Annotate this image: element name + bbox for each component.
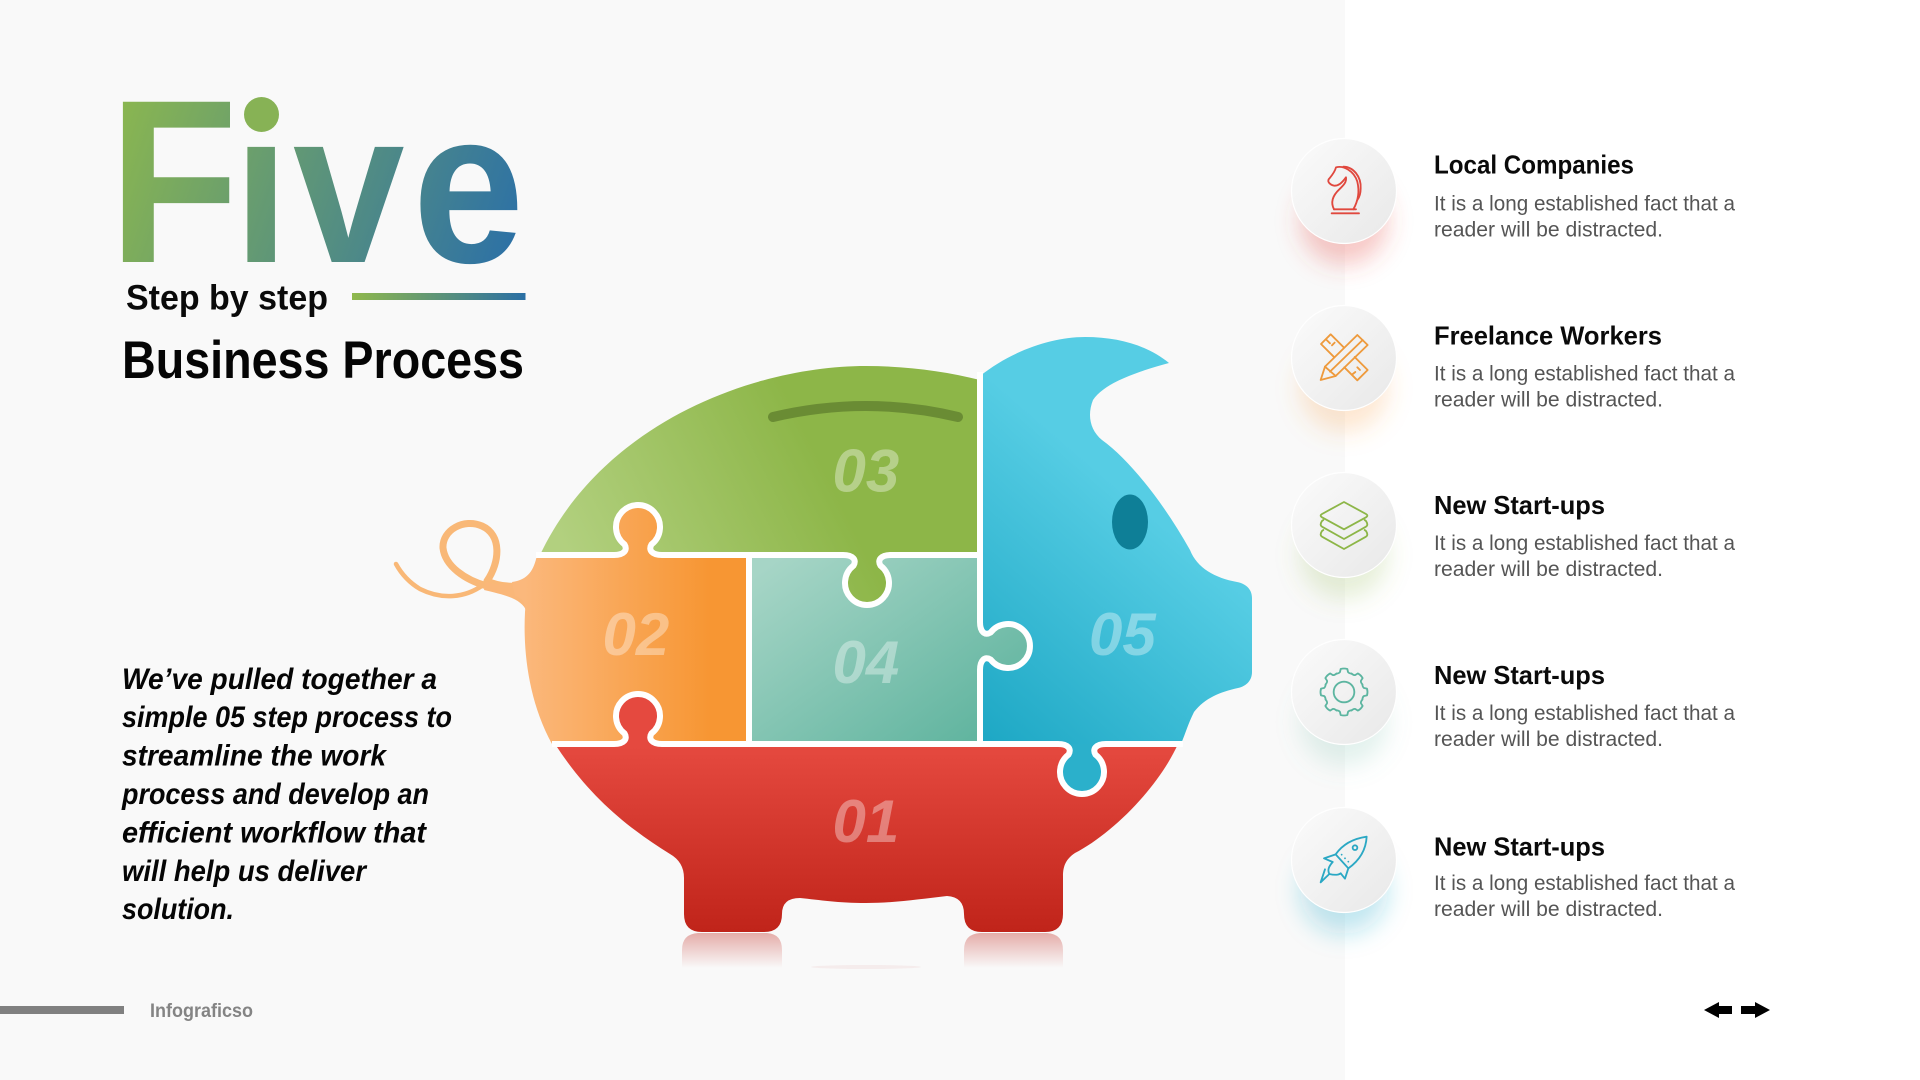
intro paragraph: efficient workflow that xyxy=(122,816,428,850)
intro paragraph: We’ve pulled together a xyxy=(122,663,437,696)
puzzle piece 01: red belly xyxy=(555,694,1178,932)
puzzle piece 02: orange rump xyxy=(512,505,749,744)
title word: Five xyxy=(122,97,518,264)
step 5: New Start-ups xyxy=(1292,808,1735,934)
icon: rocket xyxy=(1321,837,1367,882)
pig eye xyxy=(1112,494,1148,550)
piggy bank puzzle xyxy=(396,337,1252,969)
step 2: Freelance Workers xyxy=(1292,306,1735,432)
step 4: New Start-ups: reader will be distracted. xyxy=(1434,728,1663,751)
puzzle piece 04: teal xyxy=(749,555,1030,744)
intro paragraph: simple 05 step process to xyxy=(122,701,452,734)
step 5: New Start-ups: New Start-ups xyxy=(1434,832,1605,862)
number 03: 03 xyxy=(832,438,899,504)
blue puzzle tab xyxy=(1058,744,1106,794)
intro paragraph xyxy=(121,663,452,926)
step 3: New Start-ups: New Start-ups xyxy=(1434,490,1605,520)
intro paragraph: will help us deliver xyxy=(122,855,368,888)
step 2: Freelance Workers: reader will be distracted. xyxy=(1434,388,1663,412)
footer brand xyxy=(0,1001,253,1022)
step 5: New Start-ups: reader will be distracted. xyxy=(1434,898,1663,921)
pig leg reflections xyxy=(682,933,1063,969)
step 4: New Start-ups: It is a long established fact that a xyxy=(1434,702,1735,725)
step 1: Local Companies xyxy=(1292,138,1735,265)
step 3: New Start-ups xyxy=(1292,472,1735,599)
number 01: 01 xyxy=(832,788,899,855)
icon: pencil and ruler xyxy=(1321,334,1368,380)
step 5: New Start-ups: It is a long established fact that a xyxy=(1434,872,1735,895)
number 05: 05 xyxy=(1089,601,1157,668)
gradient rule xyxy=(352,293,526,300)
intro paragraph: solution. xyxy=(122,893,234,926)
heading: Business Process: Business Process xyxy=(122,331,524,390)
step 4: New Start-ups xyxy=(1292,640,1735,766)
step 2: Freelance Workers: It is a long established fact that a xyxy=(1434,362,1735,386)
pig tail xyxy=(396,523,531,612)
title block xyxy=(122,97,526,378)
navigation arrows xyxy=(1704,1002,1770,1018)
coin slot xyxy=(773,406,958,417)
subtitle: step by step: Step by step xyxy=(126,278,328,318)
white puzzle seams xyxy=(536,372,1183,794)
number 04: 04 xyxy=(832,629,899,696)
step 3: New Start-ups: reader will be distracted. xyxy=(1434,558,1663,581)
title word: Five: ive xyxy=(233,65,524,309)
icon: chess knight xyxy=(1328,167,1361,213)
step 1: Local Companies: Local Companies xyxy=(1434,150,1634,180)
puzzle piece 05: head xyxy=(980,337,1252,744)
step 1: Local Companies: reader will be distracted. xyxy=(1434,218,1663,242)
icon: gear xyxy=(1321,669,1367,715)
step 3: New Start-ups: It is a long established fact that a xyxy=(1434,532,1735,555)
number 02: 02 xyxy=(602,601,669,668)
footer brand: Infograficso xyxy=(150,1001,253,1022)
intro paragraph: process and develop an xyxy=(121,778,429,811)
background: left panel xyxy=(0,0,1345,1080)
title word: Five: F xyxy=(109,52,239,312)
step 1: Local Companies: It is a long established fact that a xyxy=(1434,192,1735,216)
step 2: Freelance Workers: Freelance Workers xyxy=(1434,320,1662,350)
intro paragraph: streamline the work xyxy=(122,740,387,772)
step 4: New Start-ups: New Start-ups xyxy=(1434,660,1605,690)
icon: layers xyxy=(1321,502,1367,549)
puzzle piece 03: green back xyxy=(540,366,980,605)
